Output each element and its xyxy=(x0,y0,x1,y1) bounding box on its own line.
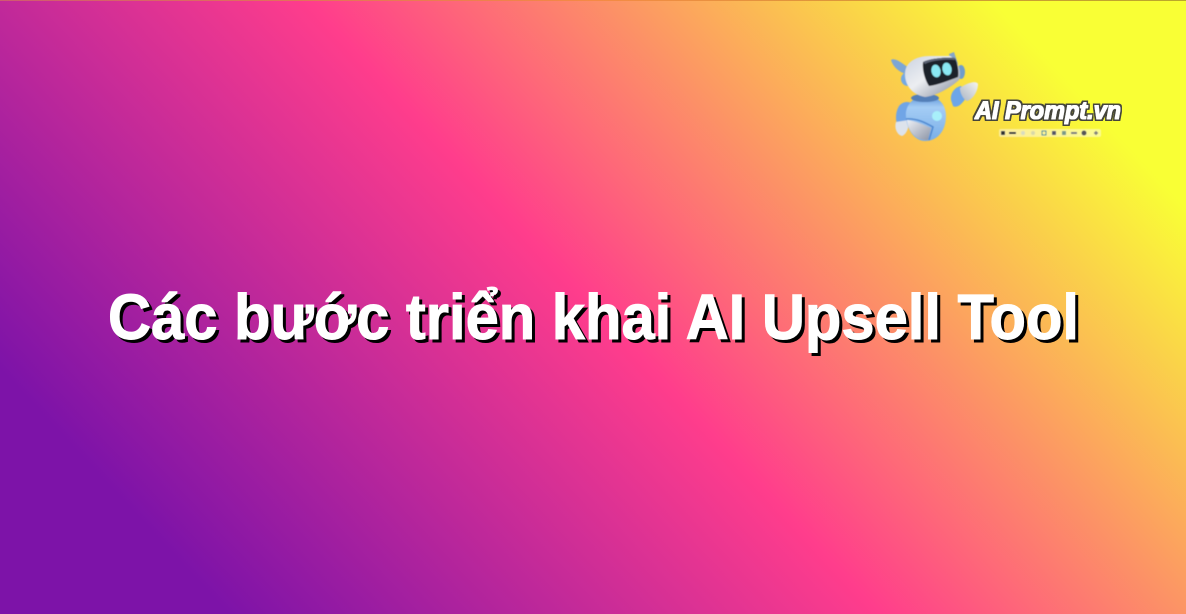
top edge line xyxy=(0,0,1186,1)
logo toolbar icons xyxy=(999,129,1101,137)
title: Các bước triển khai AI Upsell Tool xyxy=(108,281,1079,353)
icon: robot mascot xyxy=(891,52,978,141)
logo wordmark: AI Prompt.vn xyxy=(974,97,1121,125)
logo: AI Prompt.vn xyxy=(891,52,1121,141)
